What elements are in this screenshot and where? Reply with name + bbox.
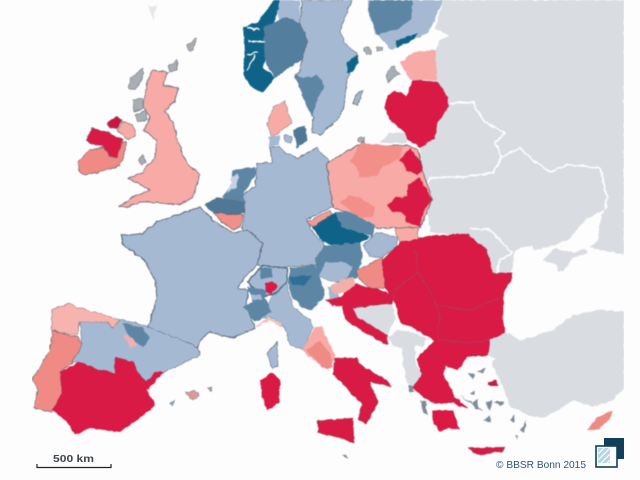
scale label: 500 km (53, 453, 94, 465)
Ireland (78, 117, 136, 175)
Latvia and Lithuania (385, 80, 448, 147)
United Kingdom (118, 70, 200, 207)
Switzerland and French Alps (243, 265, 287, 322)
BBSR logo (596, 438, 624, 467)
Slovakia (363, 228, 418, 257)
Spain south red (53, 357, 163, 435)
non-EU grey landmass east (353, 0, 624, 417)
Baltic islands (358, 47, 400, 142)
Poland (327, 142, 432, 228)
central Italy (302, 327, 335, 368)
Germany (242, 147, 335, 267)
southern Italy (333, 358, 392, 424)
Sardinia (260, 372, 280, 410)
white country borders on grey (427, 102, 607, 272)
Hungary (357, 257, 385, 290)
Lesbos (488, 380, 499, 386)
Portugal (32, 330, 82, 412)
Croatia (325, 283, 395, 345)
Rioja region (123, 335, 138, 348)
gulf of Finland (395, 29, 450, 60)
scale bar (37, 453, 111, 468)
Denmark (267, 100, 308, 148)
Corsica (267, 342, 278, 368)
Spain north pink (52, 304, 120, 335)
Estonia (400, 50, 437, 80)
Sicily (317, 418, 354, 443)
Italy north light (262, 283, 313, 350)
Scottish islands (128, 38, 197, 165)
Slovenia (330, 277, 356, 295)
inner regional borders (395, 250, 503, 343)
scale line (37, 464, 111, 468)
Aegean islands (342, 368, 527, 459)
Sweden (295, 0, 363, 135)
Czechia (307, 210, 375, 245)
Crete (468, 447, 505, 455)
Netherlands (222, 167, 257, 207)
copyright text: © BBSR Bonn 2015 (496, 459, 586, 471)
France (122, 207, 263, 347)
Balearic islands (170, 387, 212, 405)
Cyprus (587, 410, 613, 430)
Romania Bulgaria Serbia Greece red area (383, 234, 512, 408)
Peloponnese (432, 410, 460, 432)
Belgium (205, 198, 245, 230)
Austria (315, 243, 363, 283)
Finland (368, 0, 443, 50)
Spain north-centre (72, 318, 200, 382)
Basque region (123, 323, 150, 348)
northern Italy east (253, 265, 340, 328)
faint northern island (148, 6, 158, 22)
Norway (243, 0, 307, 92)
